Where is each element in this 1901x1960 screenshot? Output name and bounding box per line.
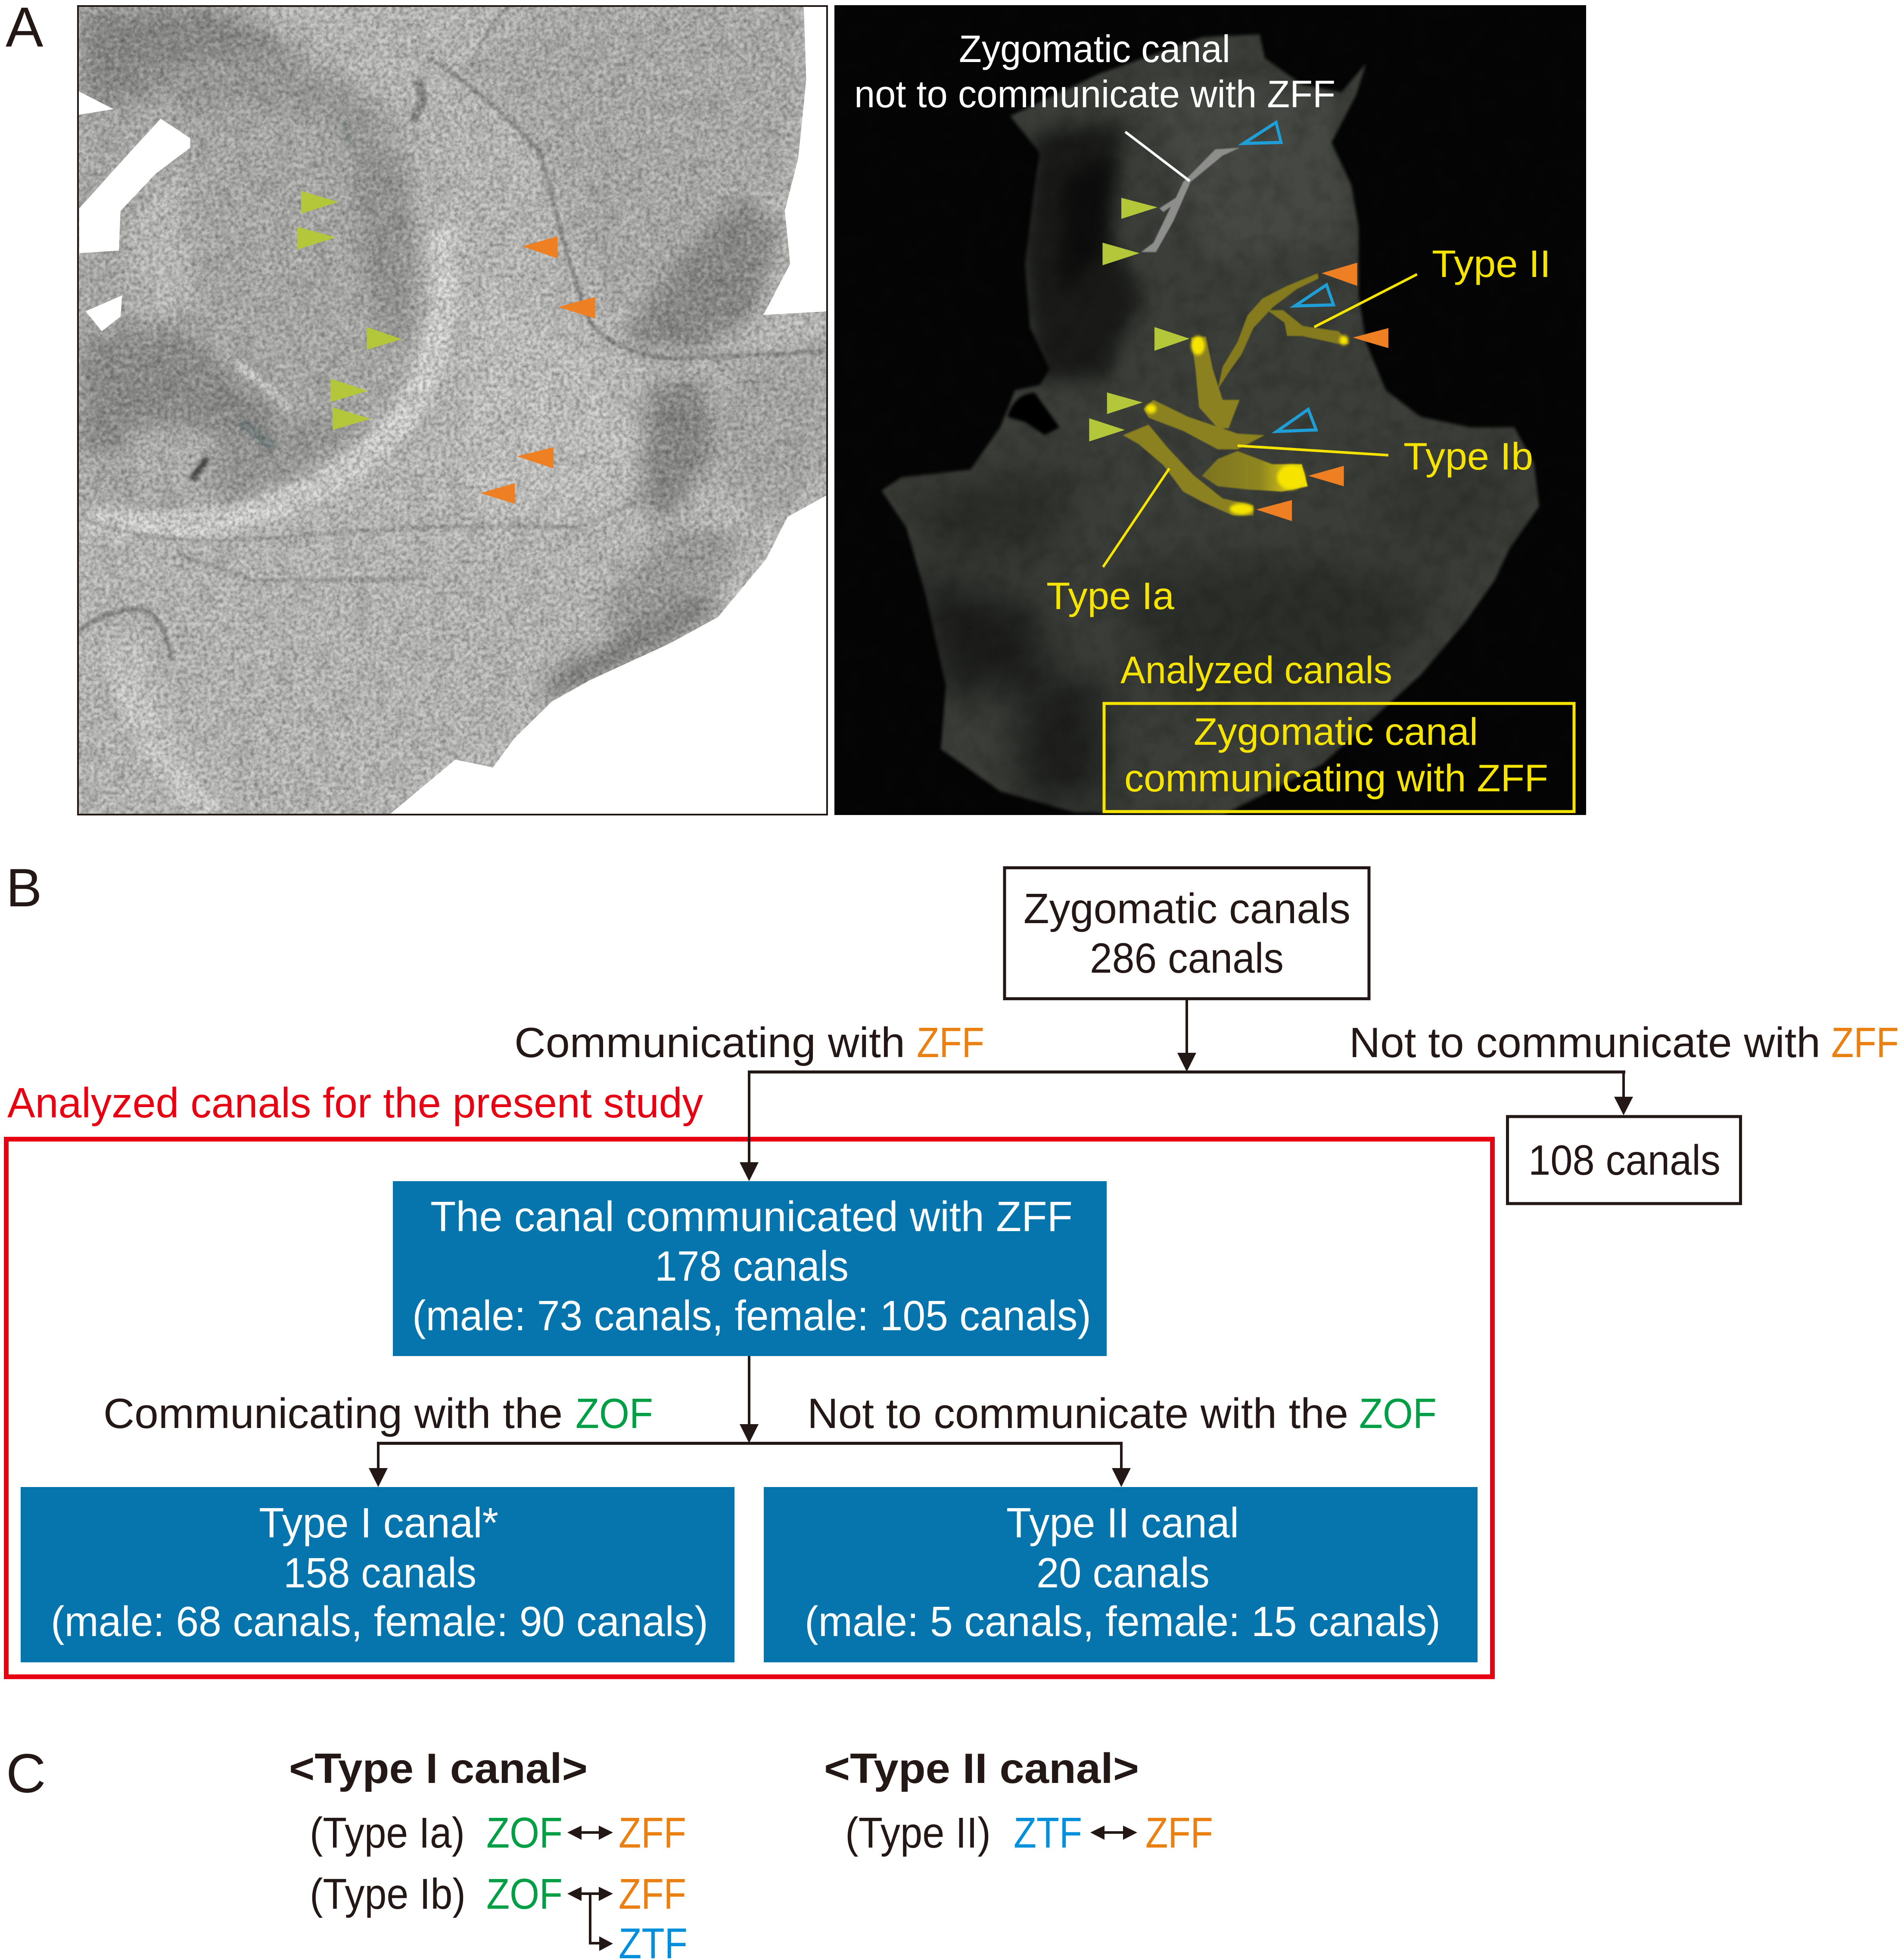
arrow and split line to type boxes (369, 1356, 1131, 1487)
blue box: canal communicated with ZFF (393, 1181, 1107, 1356)
row: type Ia ZOF to ZFF: ZFF (619, 1809, 686, 1857)
label: Analyzed canals: Analyzed canals (1120, 648, 1392, 691)
type II canal (1218, 273, 1349, 389)
callout: zygomatic canal communicating with ZFF: Zygomatic canal (1194, 710, 1478, 753)
branch label: communicating with ZFF: ZFF (917, 1019, 984, 1066)
row: type Ib ZOF to ZFF and ZTF: ZFF (619, 1870, 686, 1918)
blue box: type I canal: Type I canal* (259, 1499, 498, 1546)
panel A left: green arrowheads (ZOF) (297, 191, 402, 430)
row: type II ZTF to ZFF: ZFF (1145, 1809, 1213, 1857)
heading: analyzed canals for the present study: Analyzed canals for the present study (7, 1079, 703, 1126)
label: Type Ia: Type Ia (1046, 574, 1175, 617)
row: type Ib ZOF to ZFF and ZTF: ZOF (486, 1870, 563, 1918)
box: 108 canals: 108 canals (1528, 1136, 1721, 1184)
blue box: type II canal: 20 canals (1036, 1549, 1210, 1596)
row: type II ZTF to ZFF (845, 1809, 1213, 1857)
blue box: type I canal (21, 1487, 734, 1662)
panel A right: green arrowheads (ZOF) (1089, 198, 1189, 442)
blue box: canal communicated with ZFF: (male: 73 canals, female: 105 canals) (412, 1292, 1091, 1339)
callout: zygomatic canal communicating with ZFF (1104, 703, 1574, 812)
branch label: not to communicate with the ZOF: Not to communicate with the (807, 1390, 1348, 1437)
row: type Ia ZOF to ZFF: (Type Ia) (310, 1809, 465, 1857)
panel A left: orange arrowheads (ZFF) (481, 236, 595, 504)
bright canal openings (1145, 336, 1348, 515)
box: zygomatic canals 286 (1005, 868, 1369, 999)
panel A right: canals (1123, 148, 1349, 515)
blue box: type II canal: Type II canal (1006, 1499, 1239, 1546)
red box: analyzed canals region (6, 1139, 1492, 1677)
panel A left: frame (78, 6, 827, 815)
label: Type Ib: Type Ib (1403, 435, 1533, 478)
panel label: B: B (6, 858, 42, 918)
branch label: communicating with the ZOF: Communicating with the (103, 1390, 563, 1437)
row: type II ZTF to ZFF: (Type II) (845, 1809, 991, 1857)
panel A right: orange arrowheads (ZFF) (1256, 263, 1388, 521)
blue box: type II canal (764, 1487, 1478, 1662)
heading: type II canal: <Type II canal> (824, 1745, 1139, 1792)
heading: type I canal: <Type I canal> (289, 1745, 588, 1792)
row: type Ia ZOF to ZFF (310, 1809, 686, 1857)
row: type II ZTF to ZFF: ZTF (1014, 1809, 1082, 1857)
label: canal not communicating with ZFF (854, 27, 1335, 115)
blue box: type I canal: (male: 68 canals, female: 90 canals) (51, 1598, 708, 1645)
label: Type II: Type II (1432, 242, 1551, 285)
split line and branch arrows (740, 1070, 1633, 1181)
label: canal not communicating with ZFF: not to communicate with ZFF (854, 72, 1335, 115)
type Ib canal (1144, 336, 1308, 492)
branch label: not to communicate with the ZOF: ZOF (1359, 1390, 1437, 1437)
blue box: type II canal: (male: 5 canals, female: 15 canals) (805, 1598, 1441, 1645)
branch label: communicating with ZFF: Communicating with (514, 1019, 905, 1066)
panel A right: CT render on black background (827, 0, 1602, 827)
row: type Ib ZOF to ZFF and ZTF (310, 1870, 688, 1960)
box: zygomatic canals 286: 286 canals (1090, 934, 1284, 982)
panel label: C: C (6, 1743, 46, 1804)
blue box: type I canal: 158 canals (283, 1549, 476, 1596)
blue box: canal communicated with ZFF: The canal communicated with ZFF (430, 1193, 1073, 1240)
box: zygomatic canals 286: Zygomatic canals (1024, 885, 1350, 932)
blue box: canal communicated with ZFF: 178 canals (655, 1242, 849, 1290)
grey canal not communicating with ZFF (1141, 148, 1240, 252)
arrow: from total to split (1177, 1000, 1196, 1072)
type Ia canal (1123, 425, 1254, 515)
label: canal not communicating with ZFF: Zygomatic canal (959, 27, 1230, 70)
branch label: communicating with the ZOF: ZOF (576, 1390, 653, 1437)
panel A right: leader lines (1103, 132, 1417, 567)
row: type Ib ZOF to ZFF and ZTF: (Type Ib) (310, 1870, 466, 1918)
callout: zygomatic canal communicating with ZFF: communicating with ZFF (1124, 756, 1548, 800)
box: 108 canals (1508, 1117, 1740, 1204)
panel A right: blue outlined arrowheads (ZTF) (1244, 122, 1334, 432)
panel A left: 3D bone surface rendering (77, 3, 831, 818)
row: type Ia ZOF to ZFF: ZOF (486, 1809, 563, 1857)
branch label: not to communicate with ZFF: Not to communicate with (1349, 1019, 1820, 1066)
